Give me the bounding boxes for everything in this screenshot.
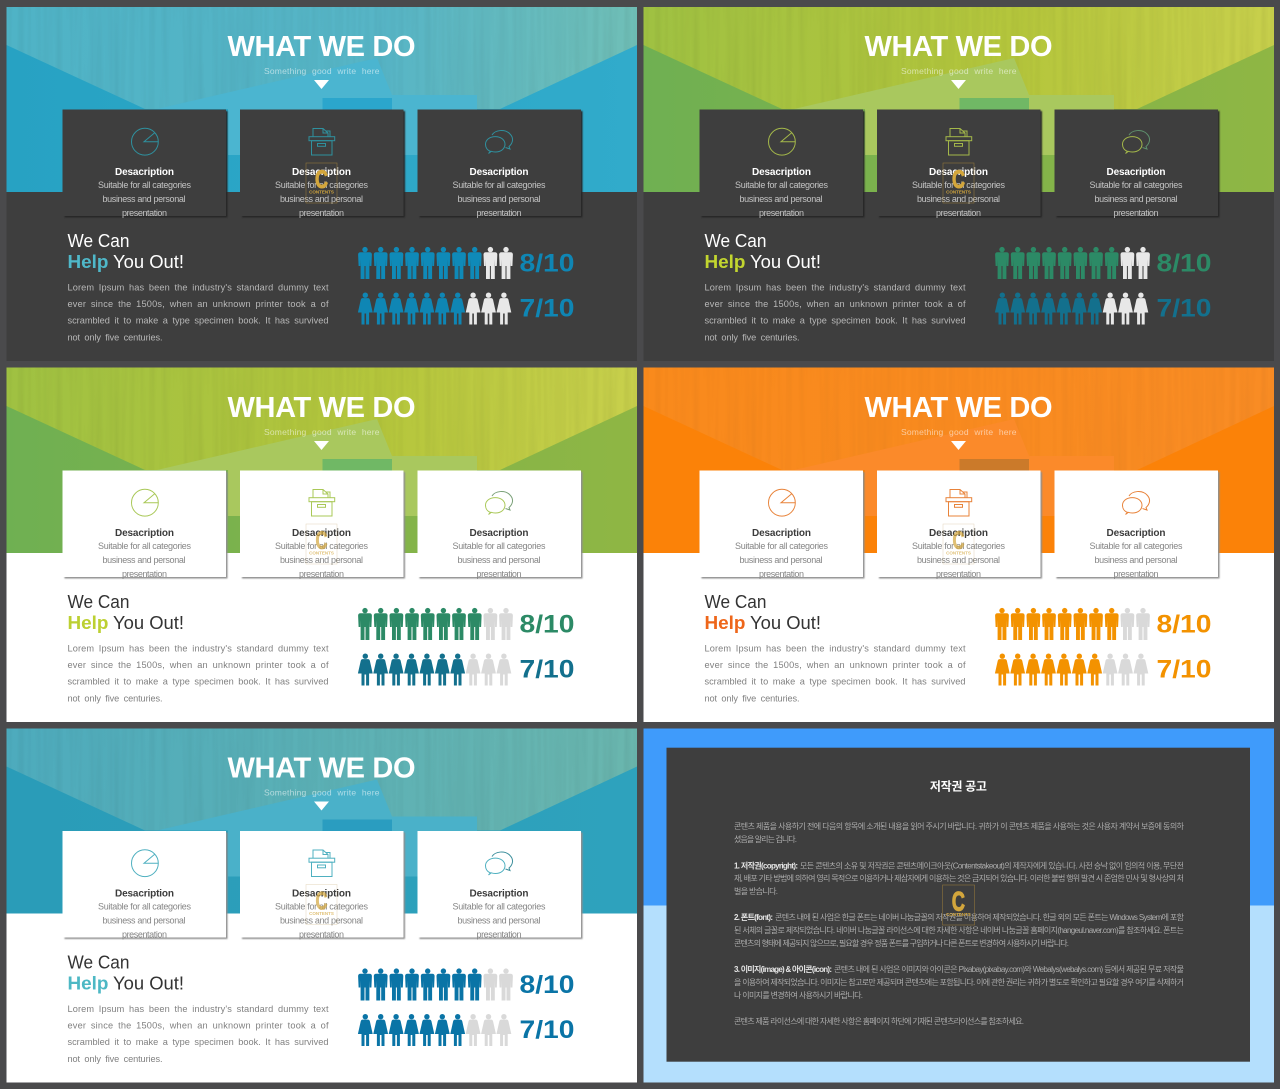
- heading: we can help: [704, 592, 821, 633]
- stat: 8/10: 8/10: [520, 250, 574, 278]
- card text: business and personal: [917, 194, 1000, 204]
- card text: presentation: [299, 208, 344, 218]
- subtitle: Something good write here: [264, 788, 380, 798]
- card text: presentation: [936, 208, 981, 218]
- card heading: Desacription: [470, 528, 528, 539]
- pictogram: 7 of 10 women: [995, 292, 1148, 324]
- card text: Suitable for all categories: [98, 902, 192, 912]
- subtitle: Something good write here: [264, 66, 380, 76]
- stat: 7/10: 7/10: [520, 1016, 574, 1044]
- body text: ever since the 1500s, when an unknown printer took a of: [704, 660, 966, 670]
- pictogram: 7 of 10 women: [995, 654, 1148, 686]
- notice section 2: [734, 912, 1185, 948]
- pictogram: 7 of 10 women: [358, 292, 511, 324]
- notice footer: 콘텐츠 제품 라이선스에 대한 자세한 사항은 홈페이지 하단에 기재된 콘텐츠라이선스를 참조하세요.: [734, 1016, 1024, 1026]
- body text: not only five centuries.: [704, 332, 800, 342]
- title: WHAT WE DO: [228, 31, 416, 63]
- icon: pie chart: [768, 489, 795, 516]
- stat: 7/10: 7/10: [520, 656, 574, 684]
- heading: we can help: We Can: [68, 952, 130, 972]
- card text: business and personal: [1094, 194, 1178, 204]
- card heading: Desacription: [292, 167, 351, 178]
- card heading: Desacription: [292, 528, 351, 539]
- body text: scrambled it to make a type specimen book. It has survived: [68, 316, 328, 326]
- arrow: [314, 441, 329, 450]
- title: WHAT WE DO: [864, 31, 1052, 63]
- card text: business and personal: [280, 555, 363, 565]
- card text: Suitable for all categories: [735, 180, 828, 190]
- arrow: [314, 802, 329, 810]
- body text: Lorem Ipsum has been the industry's standard dummy text: [704, 644, 966, 654]
- body text: [68, 644, 329, 704]
- watermark logo: C: [315, 166, 328, 194]
- body text: Lorem Ipsum has been the industry's standard dummy text: [68, 1004, 329, 1014]
- card text: Suitable for all categories: [98, 541, 192, 551]
- body text: Lorem Ipsum has been the industry's standard dummy text: [68, 644, 329, 654]
- notice section 3: 을 이용하여 제작되었습니다. 이미지는 참고로만 제공되며 콘텐츠에는 포함됩니다. 이에 관한 권리는 귀하가 별도로 확인하고 필요할 경우 여기를 삭제하거: [734, 977, 1184, 987]
- card 1: [62, 831, 228, 940]
- notice section 3: 나 이미지를 변경하여 사용하시기 바랍니다.: [734, 990, 863, 1000]
- card text: [1090, 180, 1183, 218]
- card text: business and personal: [458, 555, 540, 565]
- pictogram: 8 of 10 men: [995, 247, 1150, 279]
- slide background: [644, 368, 1274, 722]
- heading: we can help: Help: [68, 613, 108, 633]
- heading: we can help: Help: [704, 613, 746, 633]
- heading: we can help: We Can: [68, 231, 130, 251]
- body text: not only five centuries.: [704, 694, 800, 704]
- icon: pie chart: [768, 128, 795, 155]
- heading: we can help: [68, 592, 184, 633]
- body text: scrambled it to make a type specimen book. It has survived: [68, 1037, 328, 1047]
- notice panel: [666, 748, 1250, 1062]
- arrow: [951, 80, 966, 89]
- watermark logo: [943, 524, 974, 564]
- title: WHAT WE DO: [228, 392, 416, 424]
- heading: we can help: [68, 952, 184, 994]
- card text: Suitable for all categories: [275, 541, 368, 551]
- heading: we can help: [68, 231, 184, 272]
- card 2: [240, 110, 405, 218]
- card text: business and personal: [280, 916, 363, 926]
- card 1: [62, 110, 228, 218]
- card text: presentation: [122, 930, 167, 940]
- card text: [452, 180, 546, 218]
- watermark logo: CONTENTS: [309, 190, 334, 194]
- card text: presentation: [122, 208, 167, 218]
- heading: we can help: You Out!: [113, 613, 184, 633]
- stat: 8/10: 8/10: [520, 971, 574, 999]
- card text: business and personal: [102, 194, 186, 204]
- card text: presentation: [122, 569, 167, 579]
- body text: scrambled it to make a type specimen book. It has survived: [704, 676, 966, 686]
- card text: presentation: [759, 569, 804, 579]
- slide background: [6, 7, 637, 361]
- watermark logo: C: [316, 888, 328, 916]
- card text: Suitable for all categories: [452, 902, 546, 912]
- pictogram: 7 of 10 women: [358, 654, 511, 686]
- card text: business and personal: [458, 194, 540, 204]
- heading: we can help: We Can: [704, 592, 766, 612]
- icon: pie chart: [132, 128, 158, 155]
- notice section 1: 재, 배포 기타 방법에 의하여 영리 목적으로 이용하거나 제삼자에게 이용하는 것은 금지되어 있습니다. 이러한 불법 행위 발견 시 준엄한 민사 및 형사상의 처: [734, 873, 1184, 883]
- notice section 2: 된 서체의 글꼴로 제작되었습니다. 네이버 나눔글꼴 라이선스에 대한 자세한 사항은 네이버 나눔글꼴 홈페이지(hangeul.naver.com)를 참조하세요. 폰트는: [734, 925, 1184, 935]
- heading: we can help: We Can: [704, 231, 766, 251]
- icon: pie chart: [132, 850, 158, 877]
- stat: 7/10: 7/10: [1156, 295, 1212, 323]
- watermark logo: C: [952, 166, 965, 194]
- card heading: Desacription: [470, 167, 528, 178]
- heading: we can help: Help: [68, 252, 108, 272]
- heading: we can help: We Can: [68, 592, 130, 612]
- watermark logo: [306, 163, 337, 203]
- card text: business and personal: [102, 555, 186, 565]
- icon: archive box: [309, 128, 335, 155]
- card text: business and personal: [458, 916, 540, 926]
- watermark logo: [943, 163, 974, 203]
- watermark logo: C: [952, 527, 964, 555]
- icon: chat bubbles: [486, 852, 513, 875]
- watermark logo: CONTENTS: [309, 550, 334, 556]
- card heading: Desacription: [1106, 528, 1166, 539]
- slide 1: blue and dark: [6, 7, 637, 361]
- card text: presentation: [936, 569, 981, 579]
- pictogram: 8 of 10 men: [358, 608, 513, 640]
- slide 5: teal and white: [6, 728, 637, 1082]
- card text: presentation: [476, 569, 522, 579]
- watermark logo: C: [316, 527, 328, 555]
- card 2: [877, 110, 1042, 218]
- card text: [275, 541, 368, 579]
- icon: chat bubbles: [486, 131, 513, 154]
- card text: [98, 180, 192, 218]
- card text: presentation: [299, 569, 344, 579]
- pictogram: 8 of 10 men: [358, 968, 513, 1000]
- watermark logo: CONTENTS: [309, 911, 334, 916]
- card text: business and personal: [740, 555, 822, 565]
- notice section 1: 모든 콘텐츠의 소유 및 저작권은 콘텐츠메이크아웃(Contentstakeout)의 제작자에게 있습니다. 사전 승낙 없이 임의적 이용, 무단전: [800, 860, 1184, 870]
- card heading: Desacription: [752, 528, 811, 539]
- card text: Suitable for all categories: [1090, 541, 1183, 551]
- icon: archive box: [946, 490, 972, 516]
- card 1: [700, 470, 864, 579]
- body text: [68, 282, 329, 342]
- card heading: Desacription: [115, 167, 174, 178]
- body text: [704, 644, 966, 704]
- slide 3: green and white: [6, 368, 637, 722]
- card heading: Desacription: [115, 528, 174, 539]
- card text: business and personal: [740, 194, 822, 204]
- icon: pie chart: [132, 489, 158, 516]
- icon: chat bubbles: [486, 492, 513, 514]
- body text: not only five centuries.: [68, 332, 162, 342]
- heading: we can help: You Out!: [113, 252, 184, 272]
- notice section 1: 1. 저작권(copyright):: [734, 860, 798, 870]
- body text: [704, 282, 966, 342]
- card 3: [418, 110, 582, 218]
- card text: [452, 902, 546, 940]
- card text: presentation: [476, 208, 522, 218]
- card 2: [240, 470, 405, 579]
- notice section 2: 콘텐츠 내에 된 사업은 한글 폰트는 네이버 나눔글꼴의 저작권을 이용하여 제작되었습니다. 한글 외의 모든 폰트는 Windows System에 포함: [775, 912, 1185, 922]
- card heading: Desacription: [292, 888, 351, 900]
- card heading: Desacription: [752, 167, 811, 178]
- body text: Lorem Ipsum has been the industry's standard dummy text: [68, 282, 329, 292]
- card text: business and personal: [917, 555, 1000, 565]
- card text: [98, 541, 192, 579]
- card text: [275, 902, 368, 940]
- card text: Suitable for all categories: [452, 180, 546, 190]
- notice section 3: 3. 이미지(image) & 아이콘(icon):: [734, 964, 832, 974]
- subtitle: Something good write here: [901, 427, 1017, 437]
- card 2: [877, 470, 1042, 579]
- icon: archive box: [309, 850, 335, 876]
- card heading: Desacription: [115, 888, 174, 900]
- body text: Lorem Ipsum has been the industry's standard dummy text: [704, 282, 966, 292]
- card 3: [1054, 110, 1220, 218]
- card text: [98, 902, 192, 940]
- card heading: Desacription: [929, 167, 988, 178]
- card text: Suitable for all categories: [735, 541, 828, 551]
- notice intro: 셨음을 알리는 겁니다.: [734, 834, 797, 844]
- watermark logo: CONTENTS: [946, 912, 971, 917]
- watermark logo: [306, 524, 337, 564]
- pictogram: 8 of 10 men: [358, 247, 513, 279]
- card text: [1090, 541, 1183, 579]
- body text: scrambled it to make a type specimen book. It has survived: [68, 676, 328, 686]
- notice background: [644, 728, 1274, 1082]
- card text: business and personal: [102, 916, 186, 926]
- card 2: [240, 831, 405, 940]
- card text: [735, 180, 828, 218]
- subtitle: Something good write here: [264, 427, 380, 437]
- heading: we can help: [704, 231, 821, 272]
- watermark logo: C: [952, 886, 965, 916]
- card heading: Desacription: [929, 528, 988, 539]
- card text: Suitable for all categories: [452, 541, 546, 551]
- notice section 3: 콘텐츠 내에 된 사업은 이미지와 아이콘은 Pixabay(pixabay.com)와 Webalys(webalys.com) 등에서 제공된 무료 저작물: [834, 964, 1184, 974]
- notice title: 저작권 공고: [930, 778, 987, 794]
- card text: Suitable for all categories: [912, 541, 1006, 551]
- heading: we can help: You Out!: [113, 974, 184, 994]
- card text: [912, 541, 1006, 579]
- heading: we can help: You Out!: [750, 613, 821, 633]
- stat: 8/10: 8/10: [1156, 250, 1212, 278]
- heading: we can help: Help: [68, 974, 108, 994]
- card 1: [62, 470, 228, 579]
- card text: Suitable for all categories: [912, 180, 1006, 190]
- body text: ever since the 1500s, when an unknown printer took a of: [68, 299, 329, 309]
- card text: Suitable for all categories: [1090, 180, 1183, 190]
- watermark logo: CONTENTS: [946, 190, 971, 194]
- card 3: [418, 831, 582, 940]
- card 1: [700, 110, 864, 218]
- card text: presentation: [1114, 208, 1158, 218]
- pictogram: 8 of 10 men: [995, 608, 1150, 640]
- card text: presentation: [1114, 569, 1158, 579]
- watermark logo: [306, 884, 337, 924]
- heading: we can help: Help: [704, 252, 746, 272]
- slide 4: orange and white: [644, 368, 1274, 722]
- notice intro: 콘텐츠 제품을 사용하기 전에 다음의 항목에 소개된 내용을 읽어 주시기 바랍니다. 귀하가 이 콘텐츠 제품을 사용하는 것은 사용자 계약서 보증에 동의하: [734, 821, 1185, 831]
- card text: [275, 180, 368, 218]
- stat: 7/10: 7/10: [520, 295, 574, 323]
- watermark logo: CONTENTS: [946, 550, 971, 556]
- body text: ever since the 1500s, when an unknown printer took a of: [68, 660, 329, 670]
- card text: Suitable for all categories: [275, 902, 368, 912]
- body text: ever since the 1500s, when an unknown printer took a of: [704, 299, 966, 309]
- body text: ever since the 1500s, when an unknown printer took a of: [68, 1020, 329, 1030]
- body text: not only five centuries.: [68, 694, 162, 704]
- subtitle: Something good write here: [901, 66, 1017, 76]
- slide 6: copyright notice: [644, 728, 1274, 1082]
- notice section 1: 벌을 받습니다.: [734, 886, 778, 896]
- card text: [735, 541, 828, 579]
- notice section 2: 2. 폰트(font):: [734, 913, 773, 922]
- card text: [452, 541, 546, 579]
- slide background: [6, 368, 637, 722]
- card text: Suitable for all categories: [98, 180, 192, 190]
- arrow: [314, 80, 329, 89]
- icon: archive box: [309, 490, 335, 516]
- slide background: [6, 728, 637, 1082]
- card text: [912, 180, 1006, 218]
- notice section 3: [734, 964, 1184, 1000]
- card 3: [418, 470, 582, 579]
- body text: not only five centuries.: [68, 1054, 162, 1064]
- title: WHAT WE DO: [864, 392, 1052, 424]
- arrow: [951, 441, 966, 450]
- card text: presentation: [759, 208, 804, 218]
- stat: 8/10: 8/10: [520, 610, 574, 638]
- card text: presentation: [299, 930, 344, 940]
- card heading: Desacription: [470, 888, 528, 900]
- watermark logo: [942, 885, 974, 925]
- stat: 8/10: 8/10: [1156, 610, 1212, 638]
- card text: business and personal: [1094, 555, 1178, 565]
- notice intro: [734, 821, 1185, 844]
- card text: presentation: [476, 930, 522, 940]
- notice section 1: [734, 860, 1184, 896]
- icon: chat bubbles: [1122, 492, 1150, 514]
- icon: chat bubbles: [1122, 131, 1150, 154]
- slide 2: green and dark: [644, 7, 1274, 361]
- card text: Suitable for all categories: [275, 180, 368, 190]
- body text: scrambled it to make a type specimen book. It has survived: [704, 316, 966, 326]
- stat: 7/10: 7/10: [1156, 656, 1212, 684]
- card text: business and personal: [280, 194, 363, 204]
- icon: archive box: [946, 128, 972, 155]
- pictogram: 7 of 10 women: [358, 1014, 511, 1046]
- slide background: [644, 7, 1274, 361]
- body text: [68, 1004, 329, 1064]
- notice section 2: 콘텐츠의 형태에 제공되지 않으므로, 필요할 경우 정품 폰트를 구입하거나 다른 폰트로 변경하여 사용하시기 바랍니다.: [734, 938, 1069, 948]
- title: WHAT WE DO: [228, 752, 416, 784]
- card 3: [1054, 470, 1220, 579]
- heading: we can help: You Out!: [750, 252, 821, 272]
- card heading: Desacription: [1106, 167, 1166, 178]
